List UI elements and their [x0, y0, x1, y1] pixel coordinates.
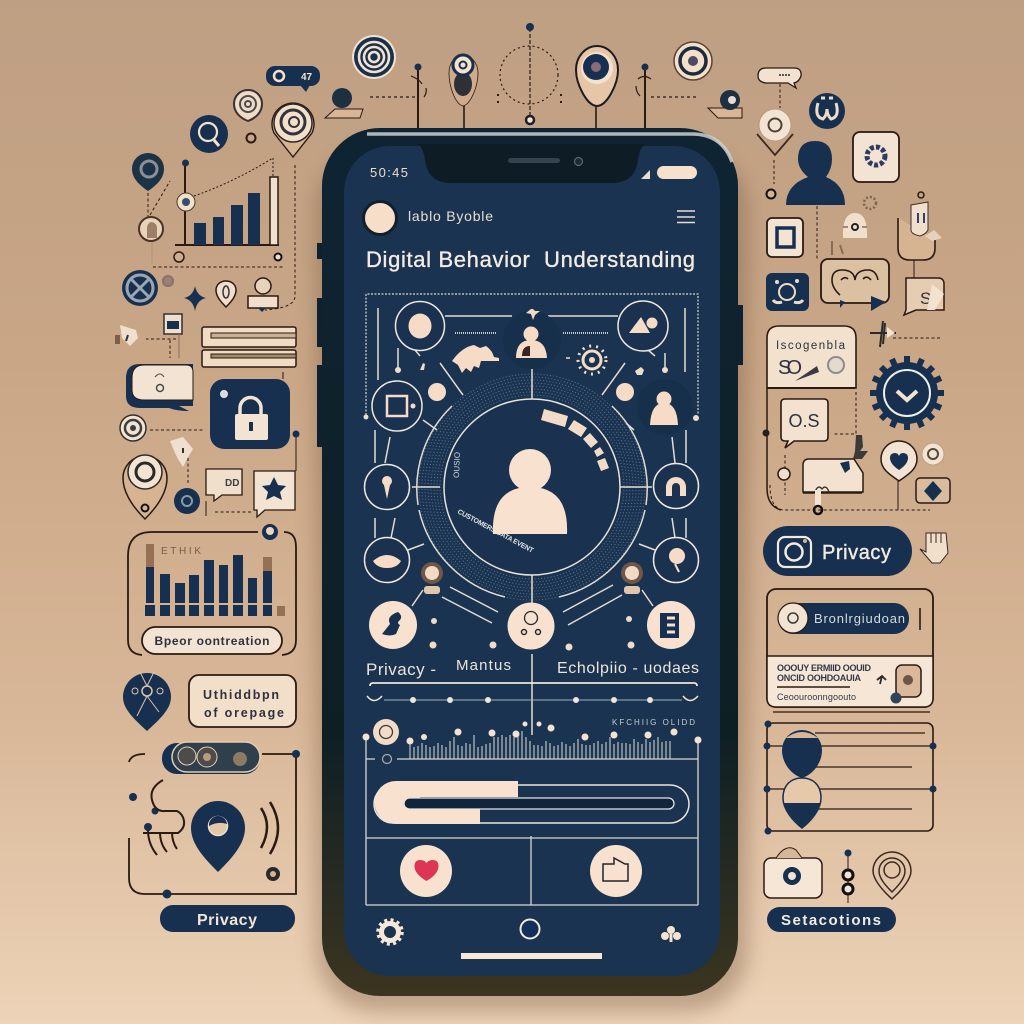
section labels [366, 657, 699, 679]
folder button [590, 845, 642, 897]
icon: text bubble [781, 399, 828, 448]
frame highlight [367, 134, 732, 162]
heart button [400, 845, 452, 897]
node: lower right [654, 538, 698, 582]
bottom nav: home ring [520, 920, 540, 938]
icon: ring pin [139, 217, 163, 264]
progress segments [541, 409, 609, 471]
status indicators [641, 166, 697, 179]
ring small text: CUSTOMERS DATA EVENT [456, 509, 535, 555]
icon: handshake [452, 345, 499, 373]
info card: SO [778, 357, 802, 379]
heading: Digital Behavior Understanding [366, 247, 695, 272]
icon: camera tile [764, 848, 822, 898]
icon: gear with check [870, 356, 944, 430]
privacy button with camera [763, 526, 912, 576]
privacy button left [160, 905, 295, 932]
phone frame [322, 128, 738, 996]
location panel [129, 742, 300, 898]
icon: helmet [832, 213, 867, 255]
profile name: lablo Byoble [408, 208, 493, 224]
status time: 50:45 [370, 165, 408, 180]
dashed target circle [498, 23, 561, 124]
connector left stem [370, 64, 426, 128]
bottom nav: gear [378, 920, 402, 944]
icon: navy person silhouette [786, 141, 845, 205]
icon: square tile [767, 218, 803, 257]
icon: bullseye pin [120, 415, 146, 441]
settings panel: Ceoouroonngoouto [777, 692, 856, 702]
node: cream center [508, 602, 554, 650]
icon: diamond tile [916, 478, 950, 503]
connector lines [375, 308, 686, 735]
divider line [773, 711, 930, 713]
icon: wheel badge [122, 270, 158, 306]
label box: Uthiddbpn [203, 688, 279, 702]
icon: outline pin [873, 852, 911, 899]
spike chart: KFCHIIG OLIDD [612, 718, 695, 727]
speech chip light [758, 68, 801, 88]
icon: hand [920, 533, 948, 563]
icon: oval pin [449, 55, 478, 128]
privacy button with camera: Privacy [822, 542, 891, 564]
icon: S bubble: S [920, 289, 931, 308]
dashed frame [366, 294, 698, 415]
navy tile with nodes [766, 273, 809, 311]
settings panel: ONCID OOHDOAUIA [777, 673, 862, 683]
settings panel [767, 589, 933, 707]
icon: small spiral pin [234, 90, 262, 121]
label box: of orepage [204, 706, 284, 720]
info card: Iscogenbla [776, 340, 846, 352]
phone [317, 128, 743, 996]
node: top left [396, 302, 444, 350]
speaker and camera [508, 158, 582, 166]
settings button: Setacotions [781, 912, 881, 929]
bar chart panel [128, 524, 296, 655]
dashed connectors right [770, 84, 941, 510]
icon: hearts panel [821, 259, 889, 311]
small dot [766, 190, 776, 198]
node: top right [618, 301, 668, 351]
icon: small arrow [853, 435, 868, 459]
label box [189, 675, 296, 727]
icon: plane [870, 321, 896, 347]
icon: camera on base right [708, 90, 742, 118]
right column icons [757, 68, 950, 932]
network diagram [364, 294, 699, 735]
icon: small tag [170, 437, 193, 467]
small marks [364, 363, 699, 421]
icon: navy flower badge [809, 93, 845, 129]
center circle [444, 399, 620, 575]
icon: text bubble: O.S [788, 411, 820, 431]
small ring [163, 276, 173, 286]
stacked input bars [202, 327, 296, 367]
icon: chat bubble: DD [225, 478, 239, 489]
node: right arch [654, 464, 698, 508]
icon: calendar [164, 314, 182, 358]
bottom nav: club [661, 926, 681, 942]
pins legend panel [764, 720, 936, 834]
speech chip dark [266, 66, 320, 92]
screen [344, 146, 720, 976]
icon: padlock tile [210, 379, 290, 449]
phone shadow [316, 150, 748, 1012]
icon: chat bubble [206, 469, 242, 516]
privacy button left: Privacy [197, 912, 257, 929]
bar chart panel: Bpeor oontreation [154, 634, 270, 648]
node: square [372, 381, 422, 431]
progress pill [374, 781, 689, 824]
speech chip dark: 47 [301, 72, 313, 83]
bar chart panel: ETHIK [161, 546, 201, 557]
node: cream left [369, 601, 417, 649]
bottom card grid [366, 836, 698, 905]
icon: teardrop location pin [576, 46, 618, 128]
dot [283, 372, 300, 471]
icon: small circle [778, 468, 790, 480]
node: dark person [637, 379, 693, 435]
node: cream right [647, 601, 695, 649]
icon: swirl badge [352, 35, 396, 79]
icon: heart pin [881, 441, 917, 510]
ring small text [452, 452, 535, 555]
home bar [461, 953, 602, 959]
node: left cone [364, 464, 410, 510]
phone side buttons [317, 243, 743, 447]
settings panel: OOOUY ERMIID OOUID [777, 663, 872, 673]
timeline [367, 683, 698, 703]
icon: ring [922, 443, 944, 465]
bar chart top [174, 158, 282, 262]
connector right stem [636, 64, 696, 128]
icon: star bubble [254, 471, 295, 517]
icon: magnifier [190, 115, 228, 153]
center person [493, 449, 567, 534]
speech bubble [126, 364, 193, 411]
icon: small pin [216, 281, 236, 307]
icon: user profile chip [248, 278, 278, 312]
small person right [621, 562, 643, 594]
icon: target ring [674, 42, 712, 80]
node: lower left [364, 538, 410, 582]
dot [762, 430, 770, 436]
dashed connectors [146, 165, 295, 512]
top icon row [325, 23, 742, 128]
icon: navy pin [132, 153, 164, 191]
icon: sun [566, 346, 606, 374]
small dot [246, 134, 256, 142]
icon: cream tile with dots [853, 132, 899, 182]
spike chart [362, 718, 702, 905]
menu icon [677, 211, 695, 222]
icon: four point star [184, 286, 206, 311]
icon: large spiral pin [272, 103, 314, 157]
avatar [364, 202, 396, 234]
label: mantus: Mantus [456, 657, 511, 674]
icon: S bubble [904, 278, 944, 315]
dotted ring [419, 374, 645, 600]
small sparkles [430, 616, 634, 650]
icon: arrow tag [115, 325, 138, 346]
icon: camera on base left [325, 88, 363, 118]
icon: gear small [864, 197, 876, 209]
icon: navy ring [174, 488, 200, 514]
node: top center [503, 309, 561, 369]
notch [415, 144, 648, 183]
icon: tag on card [898, 192, 942, 278]
left column icons [115, 66, 320, 932]
settings panel: Bronlrgiudoan [814, 611, 905, 626]
label: privacy: Privacy - [366, 660, 436, 679]
small person left [421, 562, 443, 594]
icon: large pin [123, 455, 167, 519]
icon: sketch card [803, 459, 863, 514]
icon: ring pin right [757, 109, 793, 155]
info card [767, 326, 856, 510]
settings button [767, 907, 896, 932]
dotted stem [843, 850, 853, 903]
dotted labels [455, 332, 609, 334]
icon: network pin [123, 672, 171, 731]
ring small text: OUSIO [452, 452, 462, 478]
dots [428, 383, 634, 401]
label: echolpiio: Echolpiio - uodaes [557, 660, 699, 677]
